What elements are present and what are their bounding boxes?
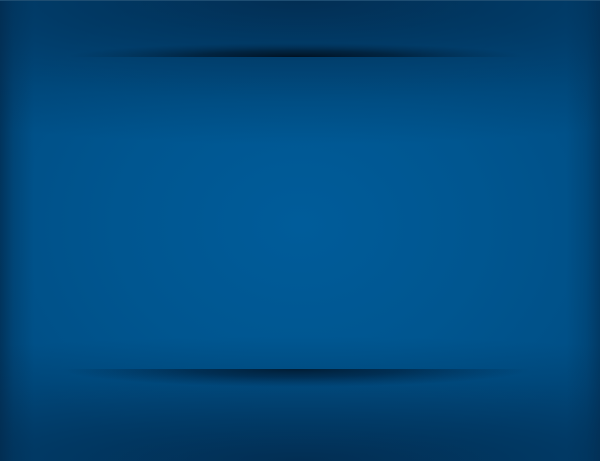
top shadow line <box>68 43 524 57</box>
bottom shadow line <box>62 369 530 387</box>
